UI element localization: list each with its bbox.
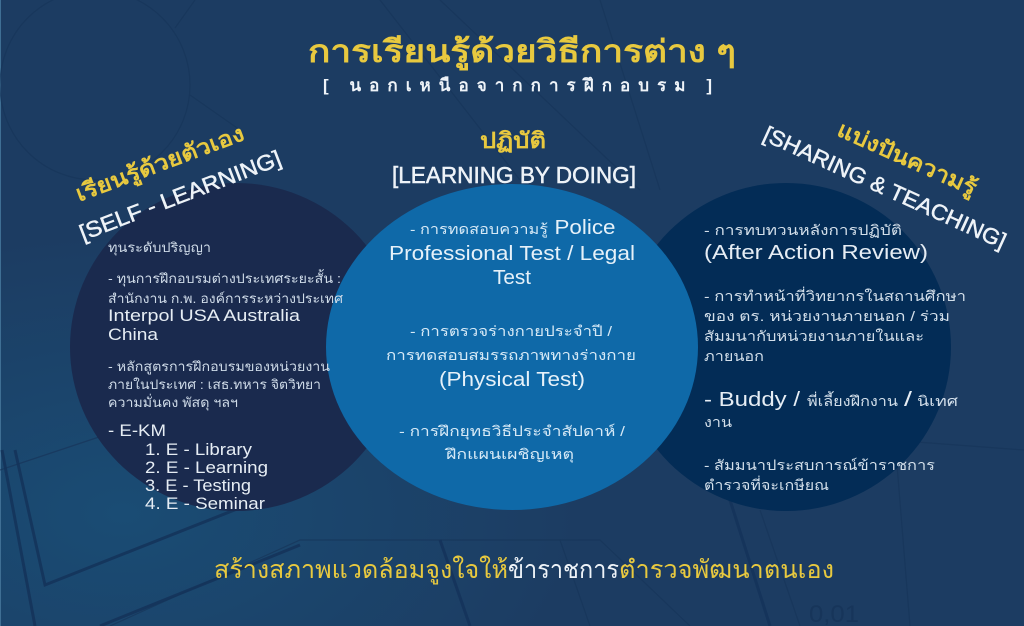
text block: sharing and teaching items: (After Action Review) [704, 242, 928, 264]
text block: sharing and teaching items: งาน [704, 414, 732, 430]
text block: learning by doing items: - การฝึกยุทธวิธีประจำสัปดาห์ / [399, 423, 625, 440]
bottom tagline: ตำรวจพัฒนาตนเอง [619, 556, 834, 584]
title: การเรียนรู้ด้วยวิธีการต่าง ๆ [308, 34, 736, 71]
text block: self-learning items: China [108, 325, 159, 344]
heading: self-learning: [SELF - LEARNING] [76, 145, 285, 245]
heading: learning by doing: ปฏิบัติ [480, 128, 546, 153]
bottom tagline: สร้างสภาพแวดล้อมจูงใจให้ [214, 555, 508, 585]
text block: learning by doing items: Test [493, 267, 531, 289]
text block: sharing and teaching items: ของ ตร. หน่วยงานภายนอก / ร่วม [704, 308, 950, 324]
subtitle: [ นอกเหนือจากการฝึกอบรม ] [323, 75, 712, 95]
text block: self-learning items: ความมั่นคง พัสดุ ฯลฯ [108, 394, 238, 411]
heading: learning by doing [392, 128, 636, 188]
text block: learning by doing items: Professional Test / Legal [389, 243, 635, 265]
heading: self-learning [72, 121, 285, 245]
bottom tagline: ข้าราชการ [508, 556, 619, 584]
text block: sharing and teaching items: - การทำหน้าที่วิทยากรในสถานศึกษา [704, 287, 966, 304]
text block: sharing and teaching items: พี่เลี้ยงฝึกงาน [807, 391, 898, 409]
panel: self-learning circle [70, 183, 402, 511]
text block: self-learning items: - E-KM [108, 421, 166, 440]
text block: self-learning items: 1. E - Library [145, 440, 253, 459]
text block: self-learning items [108, 240, 344, 513]
text block: learning by doing items: (Physical Test) [439, 369, 585, 391]
panel: learning by doing circle [326, 184, 698, 510]
heading: sharing and teaching: [SHARING & TEACHING] [759, 121, 1010, 254]
text block: sharing and teaching items: - Buddy / [704, 389, 801, 411]
text block: self-learning items: 2. E - Learning [145, 458, 268, 477]
text block: sharing and teaching items [704, 222, 966, 493]
text block: learning by doing items: การทดสอบสมรรถภาพทางร่างกาย [386, 347, 636, 363]
text block: sharing and teaching items: ภายนอก [704, 348, 764, 364]
text block: sharing and teaching items: - การทบทวนหลังการปฏิบัติ [704, 222, 902, 238]
text block: self-learning items: 3. E - Testing [145, 476, 251, 495]
text block: sharing and teaching items: นิเทศ [917, 393, 958, 409]
text block: self-learning items: Interpol USA Australia [108, 306, 301, 325]
text block: sharing and teaching items: สัมมนากับหน่วยงานภายในและ [704, 328, 924, 344]
text block: sharing and teaching items: - สัมมนาประสบการณ์ข้าราชการ [704, 457, 936, 473]
text block: self-learning items: ทุนระดับปริญญา [108, 240, 211, 256]
text block: self-learning items: - หลักสูตรการฝึกอบรมของหน่วยงาน [108, 359, 330, 375]
heading: self-learning: เรียนรู้ด้วยตัวเอง [72, 121, 248, 208]
text block: self-learning items: 4. E - Seminar [145, 494, 265, 513]
text block: learning by doing items: - การตรวจร่างกายประจำปี / [410, 323, 612, 339]
text block: self-learning items: - ทุนการฝึกอบรมต่างประเทศระยะสั้น : [108, 269, 341, 287]
text block: learning by doing items: - การทดสอบความรู้ [410, 221, 549, 238]
text block: sharing and teaching items: ตำรวจที่จะเกษียณ [704, 476, 829, 493]
panel: sharing and teaching circle [621, 183, 951, 511]
text block: sharing and teaching items: / [904, 389, 913, 411]
text block: learning by doing items: ฝึกแผนเผชิญเหตุ [444, 446, 574, 463]
text block: learning by doing items [386, 217, 636, 463]
text block: self-learning items: สำนักงาน ก.พ. องค์การระหว่างประเทศ [108, 291, 344, 306]
heading: sharing and teaching: แบ่งปันความรู้ [833, 117, 981, 202]
text block: self-learning items: ภายในประเทศ : เสธ.ทหาร จิตวิทยา [108, 377, 321, 392]
bottom tagline [214, 555, 834, 585]
text block: learning by doing items: Police [554, 217, 616, 239]
heading: learning by doing: [LEARNING BY DOING] [392, 162, 636, 188]
